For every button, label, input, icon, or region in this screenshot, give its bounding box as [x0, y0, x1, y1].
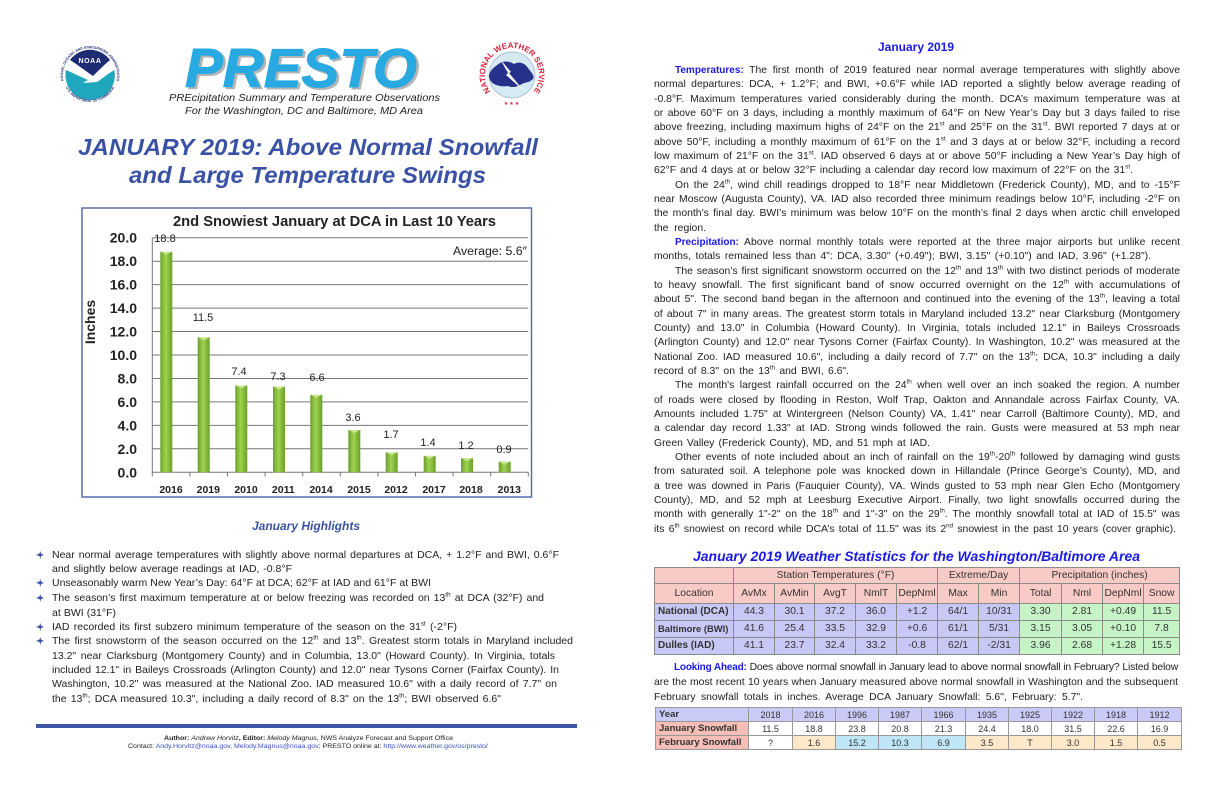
- panel: monthly narrative text: or above 60°F on 3 days, including a monthly maximum of 64°F on New Year’s Day but 3 days failed to rise: [654, 108, 1180, 119]
- data labels: 1.2: [458, 440, 474, 452]
- table: station statistics: Max: [948, 588, 968, 598]
- panel: January highlights list: The first snowstorm of the season occurred on the 12th and 13th. Greatest storm totals in Maryland included: [52, 634, 573, 647]
- data labels: 3.6: [345, 412, 361, 424]
- table: station statistics: 37.2: [825, 606, 845, 617]
- table: January and February snowfall: ?: [768, 738, 773, 748]
- y axis title: Inches: [82, 300, 98, 344]
- table: January and February snowfall: 1912: [1149, 710, 1170, 720]
- table: January and February snowfall: 20.8: [891, 724, 909, 734]
- y axis labels: 6.0: [118, 394, 137, 410]
- panel: monthly narrative text: The season’s first significant snowstorm occurred on the 12th and 13th with two distinct periods of moderate: [675, 264, 1180, 277]
- panel: January highlights list: at BWI (31°F): [52, 607, 116, 619]
- table: station statistics: -2/31: [987, 640, 1011, 651]
- panel: January highlights list: Unseasonably warm New Year’s Day: 64°F at DCA; 62°F at IAD and 61°F at BWI: [52, 577, 431, 589]
- y axis labels: 8.0: [118, 370, 137, 386]
- table: January and February snowfall: January Snowfall: [659, 722, 737, 734]
- panel: January highlights list: The season’s first maximum temperature at or below freezing was recorded on 13th at DCA (32°F) and: [52, 592, 544, 604]
- table: January and February snowfall: 1996: [847, 710, 867, 720]
- x axis labels: 2016: [159, 484, 183, 496]
- text block: Looking Ahead: are the most recent 10 years when January measured above normal snowfall in Washington and the subsequent: [654, 677, 1178, 688]
- x axis labels: 2019: [197, 484, 220, 496]
- table: January and February snowfall: 24.4: [978, 724, 996, 734]
- panel: January highlights list: Washington, 10.2" was measured at the National Zoo. IAD measured 10.6" with a daily record of 7.7" on: [52, 678, 557, 690]
- data labels: 18.8: [154, 233, 176, 245]
- table: station statistics: 11.5: [1152, 606, 1171, 617]
- heading: January 2019: January 2019: [878, 40, 954, 54]
- table: station statistics: 62/1: [948, 640, 968, 651]
- average note: Average: 5.6″: [453, 246, 527, 258]
- table: station statistics: 15.5: [1152, 640, 1172, 651]
- table: station statistics: 32.4: [825, 640, 845, 651]
- x axis labels: 2017: [422, 484, 446, 496]
- x axis labels: 2014: [309, 484, 333, 496]
- footer credits: Author: Andrew Horvitz , Editor: Melody Magnus , NWS Analyze Forecast and Support Office: [164, 735, 453, 742]
- panel: January highlights list: IAD recorded its first subzero minimum temperature of the season on the 31st (-2°F): [52, 620, 457, 633]
- y axis labels: 0.0: [118, 464, 137, 480]
- table: January and February snowfall: 1.5: [1110, 738, 1122, 748]
- header: PRESTO wordmark and subtitle: [169, 37, 441, 117]
- panel: monthly narrative text: months, totals remained less than 4": DCA, 3.30" (+0.49"); BWI, 3.15" (+0.10") and IAD, 3.96" (+1.28").: [654, 251, 1151, 262]
- title: [78, 134, 539, 188]
- panel: monthly narrative text: low maximum of 21°F on the 31st. IAD observed 6 days at or above 50°F including a New Year’s Day high of: [654, 150, 1180, 162]
- panel: monthly narrative text: its 6th snowiest on record while DCA’s total of 11.5" was its 2nd snowiest in the past 10 years (cover graphic).: [654, 522, 1176, 535]
- table: January and February snowfall: [655, 707, 1182, 750]
- table: station statistics: 2.68: [1072, 640, 1092, 651]
- table: January and February snowfall: 10.3: [891, 738, 909, 748]
- table: station statistics: Extreme/Day: [949, 570, 1008, 580]
- table: January and February snowfall: 1935: [977, 710, 997, 720]
- table: station statistics: NmlT: [864, 588, 888, 598]
- table: January and February snowfall: T: [1027, 738, 1033, 748]
- table: January and February snowfall: 1966: [933, 710, 954, 720]
- panel: monthly narrative text: -0.8°F. Maximum temperatures varied considerably during the month. DCA’s maximum temperature was at: [654, 94, 1180, 105]
- y axis labels: 2.0: [118, 441, 137, 457]
- PRESTO wordmark: PRESTO: [188, 39, 420, 101]
- table: station statistics: Station Temperatures (°F): [777, 570, 894, 580]
- table: January and February snowfall: 1918: [1106, 710, 1126, 720]
- panel: monthly narrative text: of about 7" in many areas. The greatest storm totals in Maryland included 13.2" near Clarksburg (Montgomery: [654, 309, 1180, 320]
- table: station statistics: +1.2: [907, 606, 927, 617]
- table: station statistics: 2.81: [1072, 606, 1092, 617]
- table: station statistics: -0.8: [908, 640, 926, 651]
- icon: bullets: [36, 551, 44, 645]
- text block: Looking Ahead: February snowfall totals in inches. Average DCA January Snowfall: 5.6", February: 5.7".: [654, 692, 1083, 703]
- panel: monthly narrative text: 62°F and 4 days at or below 32°F including a calendar day record low maximum of 22°F on the 31st.: [654, 164, 1133, 176]
- panel: January highlights list: [36, 549, 573, 705]
- icon: NOAA logo: U.S. DEPARTMENT OF COMMERCE: [66, 86, 114, 102]
- table: station statistics: 25.4: [784, 623, 805, 634]
- bars: [160, 252, 511, 472]
- table: January and February snowfall: 15.2: [848, 738, 866, 748]
- panel: monthly narrative text: month with generally 1"-2" on the 18th and 1"-3" on the 29th. The monthly snowfall total at IAD of 15.5" was: [654, 508, 1180, 520]
- table: station statistics: 36.0: [866, 606, 886, 617]
- panel: monthly narrative text: above 50°F, including a monthly maximum of 61°F on the 1st and 3 days at or below 32°F, including a record: [654, 135, 1180, 148]
- icon: NOAA logo: [60, 46, 120, 102]
- table: station statistics: Snow: [1149, 588, 1174, 598]
- table: January and February snowfall: 23.8: [848, 724, 866, 734]
- panel: monthly narrative text: [654, 65, 1180, 535]
- x axis labels: 2012: [384, 484, 408, 496]
- table: station statistics: 10/31: [986, 606, 1012, 617]
- y axis labels: 14.0: [110, 300, 137, 316]
- table: January and February snowfall: 3.0: [1067, 738, 1079, 748]
- table: station statistics: 32.9: [866, 623, 886, 634]
- table: station statistics: Precipitation (inches): [1052, 570, 1148, 580]
- panel: monthly narrative text: above freezing, including maximum highs of 24°F on the 21st and 25°F on the 31st. BWI reported 7 days at or: [654, 121, 1180, 133]
- table: station statistics: DepNml: [898, 588, 936, 598]
- panel: monthly narrative text: Amounts included 1.75" at Wintergreen (Nelson County) VA, 1.41" near Carroll (Baltimore County), MD, and: [654, 409, 1180, 420]
- title: and Large Temperature Swings: [129, 162, 486, 188]
- subtitle: For the Washington, DC and Baltimore, MD Area: [185, 105, 423, 117]
- x axis labels: 2018: [459, 484, 483, 496]
- table: January and February snowfall: 22.6: [1107, 724, 1125, 734]
- panel: monthly narrative text: the region.: [654, 223, 706, 234]
- icon: NOAA logo: NOAA: [78, 58, 102, 65]
- table: station statistics: +0.6: [907, 623, 927, 634]
- table: January and February snowfall: 3.5: [981, 738, 993, 748]
- panel: monthly narrative text: a calendar day record 1.33" at IAD. Strong winds followed the rain. Gusts were measured at 53 mph near: [654, 423, 1180, 434]
- table: January and February snowfall: 31.5: [1064, 724, 1082, 734]
- panel: monthly narrative text: Precipitation: Above normal monthly totals were reported at the three major airports but unlike recent: [675, 237, 1180, 248]
- table: January and February snowfall: 6.9: [937, 738, 950, 748]
- table: January and February snowfall: 1987: [890, 710, 910, 720]
- table: station statistics: National (DCA): [658, 606, 729, 617]
- text block: Looking Ahead: Looking Ahead: Does above normal snowfall in January lead to above normal snowfall in February? Listed below: [674, 662, 1178, 673]
- table: station statistics: Location: [675, 588, 713, 598]
- panel: monthly narrative text: near Moscow (Augusta County), VA. IAD also recorded three minimum readings below 10°F, including -2°F on: [654, 194, 1180, 205]
- data labels: 6.6: [309, 372, 325, 384]
- data labels: 11.5: [193, 312, 213, 324]
- panel: monthly narrative text: County), MD, and 52 mph at Leesburg Executive Airport. Finally, two light snowfalls occurred during the: [654, 495, 1180, 506]
- y axis labels: 16.0: [110, 277, 137, 293]
- table: station statistics: 7.8: [1154, 623, 1169, 634]
- table: January and February snowfall: 2018: [760, 710, 781, 720]
- panel: January highlights list: Near normal average temperatures with slightly above normal departures at DCA, + 1.2°F and BWI, 0.6°F: [52, 549, 559, 561]
- y axis labels: 12.0: [110, 324, 137, 340]
- panel: monthly narrative text: Temperatures: The first month of 2019 featured near normal average temperatures with slightly above: [675, 65, 1180, 76]
- table: station statistics: [654, 567, 1180, 655]
- table: station statistics: 61/1: [948, 623, 968, 634]
- table: station statistics: 41.1: [744, 640, 764, 651]
- icon: National Weather Service logo: ★★★: [504, 101, 520, 107]
- table: January and February snowfall: Year: [659, 708, 679, 720]
- table: January and February snowfall: 11.5: [762, 724, 779, 734]
- table: January and February snowfall: February Snowfall: [659, 736, 741, 748]
- table: station statistics: Min: [991, 588, 1007, 598]
- table: station statistics: AvMin: [780, 588, 809, 598]
- title: JANUARY 2019: Above Normal Snowfall: [78, 134, 539, 160]
- data labels: [154, 233, 512, 456]
- data labels: 1.4: [420, 437, 436, 449]
- panel: monthly narrative text: (Arlington County) and 12.0" near Tysons Corner (Fairfax County). In Washington, 10.2" was measured at the: [654, 337, 1180, 348]
- data labels: 7.4: [231, 366, 247, 378]
- table: station statistics: +0.49: [1110, 606, 1136, 617]
- table: station statistics: DepNml: [1104, 588, 1142, 598]
- table: station statistics: 33.5: [825, 623, 845, 634]
- bar chart: January snowfall at DCA: [81, 207, 532, 498]
- table: station statistics: 3.96: [1031, 640, 1051, 651]
- table: station statistics: 5/31: [989, 623, 1009, 634]
- table: station statistics: +0.10: [1110, 623, 1136, 634]
- panel: monthly narrative text: County) and 13.0" in Columbia (Howard County). In Virginia, totals included 12.1" in Baileys Crossroads: [654, 323, 1180, 334]
- text block: Looking Ahead: [654, 662, 1178, 703]
- table: station statistics: 41.6: [744, 623, 764, 634]
- table: January and February snowfall: 0.5: [1153, 738, 1166, 748]
- panel: monthly narrative text: record of 8.3" on the 13th and BWI, 6.6".: [654, 365, 849, 377]
- table: station statistics: 33.2: [866, 640, 886, 651]
- table: station statistics: Dulles (IAD): [658, 640, 715, 651]
- panel: monthly narrative text: On the 24th, wind chill readings dropped to 18°F near Middletown (Frederick County), MD, and to -15°F: [675, 178, 1180, 191]
- table: January and February snowfall: 2016: [804, 710, 824, 720]
- table: station statistics: 3.30: [1031, 606, 1051, 617]
- x axis labels: 2010: [234, 484, 258, 496]
- panel: monthly narrative text: National Zoo. IAD measured 10.6", including a daily record of 7.7" on the 13th; DCA, 10.3" including a daily: [654, 350, 1180, 363]
- data labels: 7.3: [270, 371, 286, 383]
- table: station statistics: AvgT: [823, 588, 847, 598]
- PRESTO wordmark: PRESTO: [185, 37, 417, 99]
- panel: January highlights list: included 12.1" in Baileys Crossroads (Arlington County) and 12.0" near Tysons Corner (Fairfax County). In: [52, 664, 559, 676]
- table: station statistics: 64/1: [948, 606, 968, 617]
- table: station statistics: Nml: [1073, 588, 1091, 598]
- icon: National Weather Service logo: NATIONAL WEATHER SERVICE: [479, 42, 545, 94]
- y axis labels: [110, 230, 137, 480]
- data labels: 1.7: [383, 429, 399, 441]
- chart title: 2nd Snowiest January at DCA in Last 10 Years: [173, 213, 496, 230]
- table: station statistics: 3.05: [1072, 623, 1092, 634]
- panel: monthly narrative text: the month’s final day. BWI’s minimum was below 10°F on the month’s final 2 days when arctic chill enveloped: [654, 208, 1180, 219]
- subtitle: PREcipitation Summary and Temperature Observations: [169, 92, 441, 104]
- table: January and February snowfall: 1.6: [808, 738, 820, 748]
- panel: monthly narrative text: of roads were closed by flooding in Reston, Wolf Trap, Oakton and Annandale across Fairfax County, VA.: [654, 395, 1180, 406]
- x axis labels: [159, 484, 521, 496]
- table: station statistics: Total: [1030, 588, 1051, 598]
- y axis labels: 10.0: [110, 347, 137, 363]
- x axis labels: 2011: [272, 484, 295, 496]
- table: January and February snowfall: 1925: [1020, 710, 1040, 720]
- table: January and February snowfall: 16.9: [1151, 724, 1168, 734]
- panel: January highlights list: the 13th; DCA measured 10.3", including a daily record of 8.3" on the 13th; BWI observed 6.6": [52, 692, 501, 705]
- table: January and February snowfall: 18.0: [1021, 724, 1039, 734]
- panel: monthly narrative text: from saturated soil. A telephone pole was knocked down in Hillandale (Prince George’s County), MD, and: [654, 466, 1180, 477]
- footer credits: [128, 735, 488, 750]
- table: January and February snowfall: 18.8: [805, 724, 823, 734]
- table: station statistics: +1.28: [1110, 640, 1136, 651]
- panel: monthly narrative text: to heavy snowfall. The first significant band of snow occurred overnight on the 12th with accumulations of: [654, 279, 1180, 291]
- y axis labels: 18.0: [110, 253, 137, 269]
- subtitle: [169, 92, 441, 117]
- panel: monthly narrative text: The month's largest rainfall occurred on the 24th when well over an inch soaked the region. A number: [675, 379, 1180, 391]
- y axis labels: 20.0: [110, 230, 137, 246]
- y axis labels: 4.0: [118, 417, 137, 433]
- panel: January highlights list: and slightly below average readings at IAD, -0.8°F: [52, 563, 292, 575]
- footer credits: Contact: Andy.Horvitz@noaa.gov, Melody.Magnus@noaa.gov ; PRESTO online at: http://www.weather.gov/os/presto/: [128, 743, 488, 750]
- table: station statistics: Baltimore (BWI): [658, 623, 728, 634]
- panel: monthly narrative text: about 5". The second band began in the afternoon and continued into the evening of the 13th, leaving a total: [654, 293, 1180, 305]
- divider rule: [36, 724, 577, 728]
- table: station statistics: AvMx: [741, 588, 767, 598]
- table: station statistics: 30.1: [784, 606, 805, 617]
- x axis labels: 2015: [347, 484, 371, 496]
- panel: monthly narrative text: normal departures: DCA, + 1.2°F; and BWI, +0.6°F while IAD reported a slightly below average reading of: [654, 79, 1180, 90]
- panel: January highlights list: 13.2" near Clarksburg (Montgomery County) and in Columbia, 13.0" (Howard County). In Virginia, totals: [52, 650, 555, 662]
- data labels: 0.9: [496, 444, 512, 456]
- table: January and February snowfall: 21.3: [935, 724, 952, 734]
- heading: weather statistics: January 2019 Weather Statistics for the Washington/Baltimore Area: [693, 549, 1140, 564]
- x axis labels: 2013: [498, 484, 521, 496]
- table: station statistics: 23.7: [784, 640, 805, 651]
- panel: monthly narrative text: a tree was downed in Paris (Fauquier County), VA. Winds gusted to 53 mph near Glen Echo (Montgomery: [654, 481, 1180, 492]
- icon: NOAA logo: NATIONAL OCEANIC AND ATMOSPHERIC ADMINISTRATION: [60, 46, 120, 81]
- heading: January Highlights: January Highlights: [252, 519, 360, 533]
- panel: monthly narrative text: Other events of note included about an inch of rainfall on the 19th-20th followed by damaging wind gusts: [675, 451, 1180, 463]
- table: January and February snowfall: 1922: [1063, 710, 1083, 720]
- table: station statistics: 44.3: [744, 606, 764, 617]
- table: station statistics: 3.15: [1031, 623, 1051, 634]
- panel: monthly narrative text: Green Valley (Frederick County), MD, and 51 mph at IAD.: [654, 438, 930, 449]
